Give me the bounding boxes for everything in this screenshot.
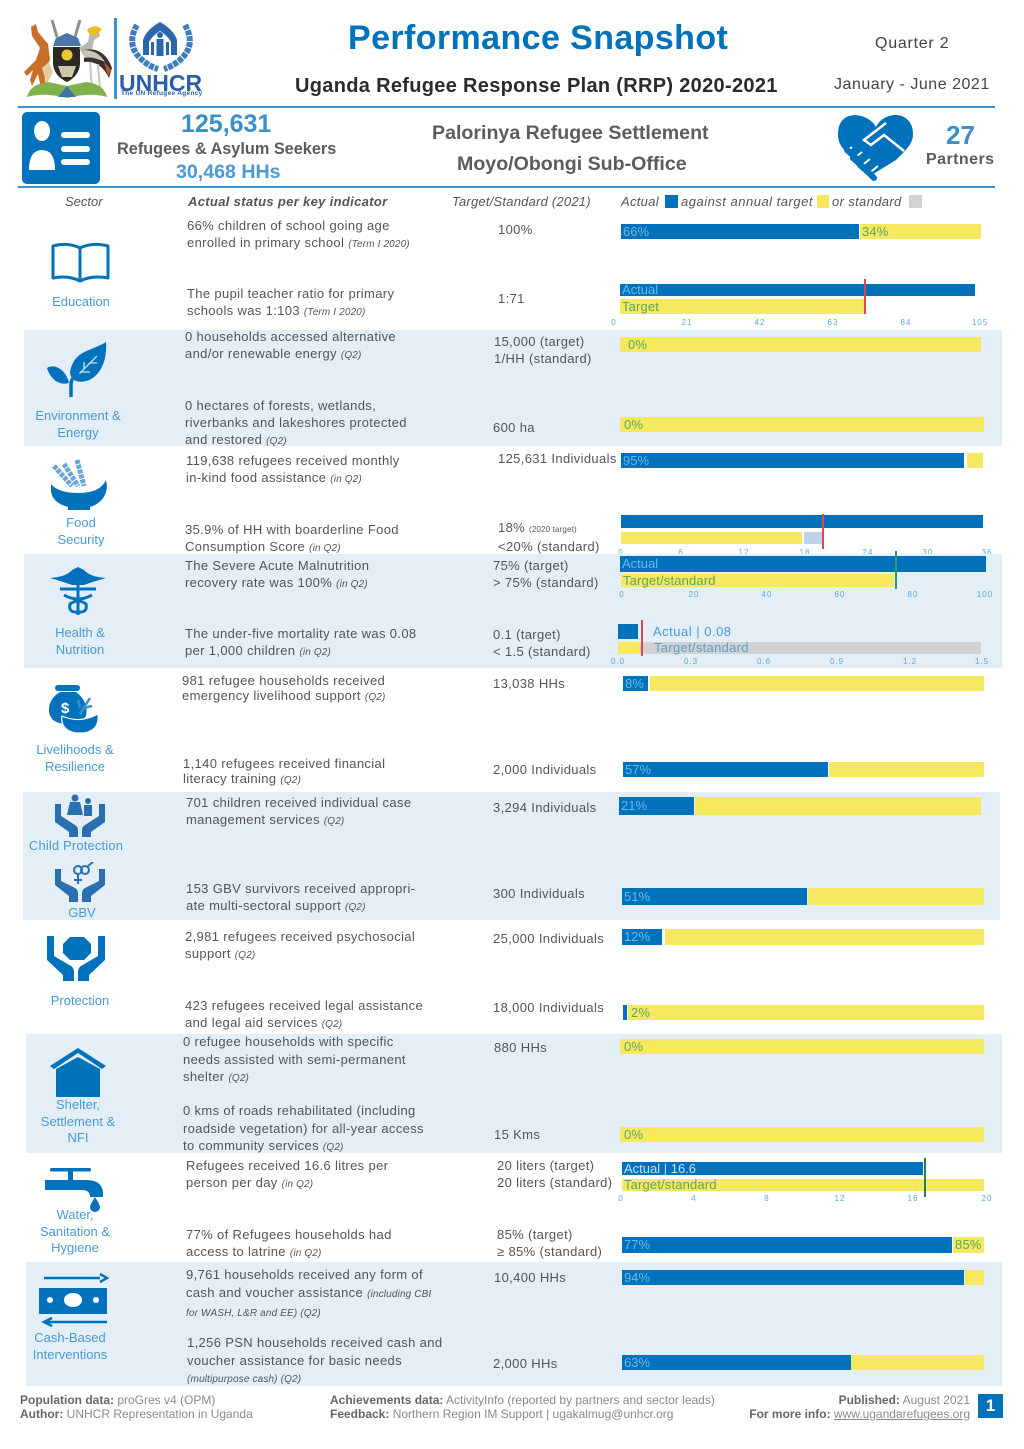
indicator text <box>185 329 396 361</box>
summary band <box>22 110 995 184</box>
panel: livelihoods and resilience <box>24 668 1002 792</box>
axis: 105 <box>972 318 988 327</box>
footer: published and link: For more info: www.ugandarefugees.org <box>749 1407 970 1421</box>
indicator text: 0 hectares of forests, wetlands, <box>185 398 376 413</box>
indicator text: shelter (Q2) <box>183 1069 249 1084</box>
sector label: Settlement & <box>41 1114 115 1128</box>
target text: 18% (2020 target) <box>498 520 577 535</box>
icon: house <box>48 1046 108 1099</box>
axis: 0.3 <box>684 657 698 666</box>
axis <box>612 1194 1002 1203</box>
target text: 600 ha <box>493 420 535 435</box>
bar: case management: 21% <box>621 798 647 813</box>
target text: 20 liters (target) <box>497 1158 594 1173</box>
indicator text <box>186 1226 392 1262</box>
bar chart: pupil teacher ratio: Target <box>622 299 659 314</box>
subtitle: Uganda Refugee Response Plan (RRP) 2020-2021 <box>295 75 778 97</box>
bar chart: malnutrition recovery: Target/standard <box>623 573 716 588</box>
footer: population and author: Population data: proGres v4 (OPM) <box>20 1393 215 1407</box>
indicator text: 77% of Refugees households had <box>186 1227 392 1242</box>
bar: latrine access: 77% <box>624 1237 650 1252</box>
axis: 12 <box>835 1194 845 1203</box>
axis: 60 <box>835 590 845 599</box>
target text: 75% (target) <box>493 558 569 573</box>
indicator text <box>182 673 385 705</box>
panel: environment and energy <box>24 330 1002 446</box>
logo: UNHCR <box>119 22 203 97</box>
header <box>24 18 990 99</box>
axis: 0.6 <box>757 657 771 666</box>
indicator text: recovery rate was 100% (in Q2) <box>185 575 368 590</box>
target text <box>493 558 599 590</box>
axis: 30 <box>923 548 933 557</box>
indicator text: schools was 1:103 (Term I 2020) <box>187 303 365 318</box>
bar: food assistance <box>621 453 983 468</box>
indicator text <box>186 1157 388 1193</box>
logo tagline: The UN Refugee Agency <box>121 90 203 97</box>
indicator text <box>185 928 415 964</box>
target text: 0.1 (target) <box>493 627 561 642</box>
bar: food assistance: 95% <box>623 453 649 468</box>
bar: legal assistance <box>623 1005 984 1020</box>
axis <box>610 657 1000 666</box>
axis: 1.5 <box>975 657 989 666</box>
bar chart: food consumption <box>621 514 983 549</box>
indicator text: 0 refugee households with specific <box>183 1034 394 1049</box>
bar: financial literacy: 57% <box>625 762 651 777</box>
header rule <box>18 106 995 108</box>
bar: multipurpose cash: 63% <box>624 1355 650 1370</box>
indicator text: 119,638 refugees received monthly <box>186 453 400 468</box>
indicator text: (multipurpose cash) (Q2) <box>187 1374 301 1385</box>
sector label <box>10 741 140 775</box>
indicator text: support (Q2) <box>185 946 255 961</box>
axis: 0 <box>619 590 625 599</box>
indicator text <box>185 398 407 447</box>
bar: emergency support <box>623 676 984 691</box>
sector label: NFI <box>68 1130 88 1145</box>
icon: water tap <box>43 1165 105 1212</box>
target text: < 1.5 (standard) <box>493 644 591 659</box>
axis: 80 <box>908 590 918 599</box>
indicator text: ate multi-sectoral support (Q2) <box>186 898 366 913</box>
target text: 13,038 HHs <box>493 676 565 691</box>
footer: achievements and feedback: Feedback: Northern Region IM Support | ugakalmug@unhcr.org <box>330 1407 673 1421</box>
indicator text: 1,256 PSN households received cash and <box>187 1335 442 1350</box>
footer: published and link: Published: August 2021 <box>839 1393 970 1407</box>
axis <box>611 318 988 327</box>
sector label <box>55 625 105 657</box>
indicator text: for WASH, L&R and EE) (Q2) <box>186 1308 321 1319</box>
sector label: GBV <box>68 905 96 920</box>
axis: 0 <box>618 548 624 557</box>
indicator text: Refugees received 16.6 litres per <box>186 1158 388 1173</box>
axis: 63 <box>828 318 838 327</box>
bar: emergency support: 8% <box>625 676 644 691</box>
indicator text <box>187 218 410 250</box>
axis: 6 <box>678 548 684 557</box>
indicator text: roadside vegetation) for all-year access <box>183 1120 424 1136</box>
target text: 125,631 Individuals <box>498 451 617 466</box>
target text <box>494 334 592 366</box>
sector label <box>13 1097 143 1146</box>
indicator text <box>187 286 394 318</box>
page number: 1 <box>986 1396 995 1415</box>
bar: multipurpose cash <box>622 1355 984 1370</box>
axis: 16 <box>908 1194 918 1203</box>
bar chart: malnutrition recovery: Actual <box>622 556 658 571</box>
footer: achievements and feedback: Achievements data: ActivityInfo (reported by partners and sector leads) <box>330 1393 715 1407</box>
bar: GBV support: 51% <box>624 889 650 904</box>
title: Performance Snapshot <box>348 19 728 57</box>
icon: money bag and bowl: $ <box>61 700 70 717</box>
indicator text: emergency livelihood support (Q2) <box>182 688 385 703</box>
sector label: Health & <box>55 625 105 640</box>
indicator text: person per day (in Q2) <box>186 1175 313 1190</box>
sector label <box>5 1329 135 1363</box>
indicator text <box>185 558 369 590</box>
indicator text <box>183 756 385 788</box>
target text: 18,000 Individuals <box>493 1000 604 1015</box>
bar chart: water litres: Actual | 16.6 <box>624 1161 696 1176</box>
target text: 25,000 Individuals <box>493 931 604 946</box>
icon: hands with children <box>53 793 107 838</box>
target text: 15,000 (target) <box>494 334 585 349</box>
icon: hands protecting <box>45 934 107 982</box>
target text: 15 Kms <box>494 1127 540 1142</box>
bar: cash and voucher: 94% <box>624 1270 650 1285</box>
sector label: Energy <box>57 425 99 440</box>
sector label: Environment & <box>35 408 121 423</box>
panel: health and nutrition <box>24 554 1002 668</box>
axis: 100 <box>977 590 993 599</box>
bar chart: pupil teacher ratio: Actual <box>622 282 658 297</box>
axis: 40 <box>762 590 772 599</box>
target text: 880 HHs <box>494 1040 547 1055</box>
sector label <box>58 515 104 547</box>
indicator text: riverbanks and lakeshores protected <box>185 415 407 430</box>
settlement name: Palorinya Refugee Settlement <box>432 122 709 144</box>
bar: latrine access <box>622 1237 984 1253</box>
icon: leaf <box>47 342 106 397</box>
target text: 300 Individuals <box>493 886 585 901</box>
target text: 2,000 Individuals <box>493 762 597 777</box>
target text <box>497 1157 612 1191</box>
footer: achievements and feedback <box>330 1393 715 1421</box>
axis: 20 <box>689 590 699 599</box>
indicator text: The Severe Acute Malnutrition <box>185 558 369 573</box>
axis: 0 <box>611 318 617 327</box>
bar chart: under-five mortality: Actual | 0.08 <box>653 624 732 639</box>
axis <box>619 590 993 599</box>
legend: actual: Actual <box>621 194 659 209</box>
icon: hands with gender symbols <box>53 862 107 904</box>
sector label: Sanitation & <box>40 1224 110 1238</box>
target text: 20 liters (standard) <box>497 1175 612 1190</box>
indicator text <box>183 1102 424 1156</box>
bar chart: water litres <box>622 1158 984 1197</box>
indicator text: management services (Q2) <box>186 812 344 827</box>
bar: renewable energy: 0% <box>628 337 647 352</box>
target text: 1:71 <box>498 291 525 306</box>
indicator text <box>186 880 415 916</box>
bar: enrolment: 34% <box>862 224 888 239</box>
legend: actual <box>620 194 922 209</box>
bar: psychosocial support <box>622 929 984 945</box>
icon: book <box>52 242 110 282</box>
indicator text: to community services (Q2) <box>183 1138 344 1153</box>
bar chart: water litres: Target/standard <box>624 1177 717 1192</box>
indicator text: 0 households accessed alternative <box>185 329 396 344</box>
indicator text: 153 GBV survivors received appropri- <box>186 881 415 896</box>
column: target: Target/Standard (2021) <box>452 194 591 209</box>
sector label <box>10 1207 140 1256</box>
column: status: Actual status per key indicator <box>188 194 388 209</box>
footer <box>18 1392 1004 1420</box>
sector label: Resilience <box>45 759 105 774</box>
target text: > 75% (standard) <box>493 575 599 590</box>
indicator text <box>183 1033 406 1088</box>
logo: Uganda coat of arms <box>24 20 112 98</box>
sector label: Interventions <box>33 1347 107 1362</box>
sector label: Cash-Based <box>34 1330 106 1345</box>
sector label: Water, <box>56 1207 94 1222</box>
indicator text: needs assisted with semi-permanent <box>183 1052 406 1066</box>
indicator text: 9,761 households received any form of <box>186 1267 423 1282</box>
indicator text: 35.9% of HH with boarderline Food <box>185 522 399 537</box>
axis: 8 <box>764 1194 770 1203</box>
indicator text <box>186 1266 431 1322</box>
footer: published and link <box>700 1393 970 1421</box>
panel: protection <box>24 920 1002 1034</box>
axis: 42 <box>755 318 765 327</box>
icon: UNHCR emblem <box>129 22 193 72</box>
target text: <20% (standard) <box>498 539 600 554</box>
bar chart: under-five mortality <box>618 620 981 656</box>
bar: financial literacy <box>623 762 984 777</box>
page number <box>978 1394 1003 1418</box>
indicator text: in-kind food assistance (in Q2) <box>186 470 362 485</box>
indicator text: 423 refugees received legal assistance <box>185 998 423 1013</box>
axis: 1.2 <box>903 657 917 666</box>
target text: 100% <box>498 222 533 237</box>
sector label: Child Protection <box>29 838 123 853</box>
legend: actual: or standard <box>832 194 902 209</box>
bar: GBV support <box>622 888 984 905</box>
target text <box>498 520 600 554</box>
indicator text: and legal aid services (Q2) <box>185 1015 342 1030</box>
indicator text: enrolled in primary school (Term I 2020) <box>187 235 410 250</box>
indicator text: 2,981 refugees received psychosocial <box>185 929 415 944</box>
icon: person card <box>22 112 100 184</box>
indicator text: 0 kms of roads rehabilitated (including <box>183 1103 416 1118</box>
stat label: Refugees & Asylum Seekers <box>117 140 336 158</box>
sector label: Nutrition <box>56 642 104 657</box>
sector label: Food <box>66 515 96 530</box>
panel: child protection and GBV <box>23 792 1000 920</box>
bar: legal assistance: 2% <box>631 1005 650 1020</box>
icon: caduceus <box>50 567 106 615</box>
target text: 10,400 HHs <box>494 1270 566 1285</box>
bar: psychosocial support: 12% <box>624 929 650 944</box>
legend: actual: against annual target <box>681 194 813 209</box>
bar: latrine access: 85% <box>955 1237 981 1252</box>
panel: water, sanitation and hygiene <box>26 1153 1002 1262</box>
bar: semi-permanent shelter: 0% <box>624 1039 643 1054</box>
panel: food security <box>51 451 992 557</box>
sector label: Livelihoods & <box>36 742 114 757</box>
indicator text: literacy training (Q2) <box>183 771 301 786</box>
target text <box>493 627 591 659</box>
axis: 18 <box>800 548 810 557</box>
axis: 21 <box>682 318 692 327</box>
panel: shelter, settlement and NFI <box>26 1034 1002 1153</box>
axis: 0.9 <box>830 657 844 666</box>
target text: 85% (target) <box>497 1227 573 1242</box>
indicator text: per 1,000 children (in Q2) <box>185 643 331 658</box>
stat: refugees: 125,631 <box>181 110 271 138</box>
sector label: Security <box>58 532 104 547</box>
logo wordmark: UNHCR <box>119 70 202 96</box>
footer: population and author <box>20 1393 253 1421</box>
bar chart: malnutrition recovery <box>620 551 986 589</box>
indicator text: 981 refugee households received <box>182 673 385 688</box>
indicator text: and/or renewable energy (Q2) <box>185 346 361 361</box>
column headers <box>65 194 922 209</box>
bar chart: pupil teacher ratio <box>620 279 975 314</box>
indicator text <box>186 453 400 485</box>
column: sector: Sector <box>65 194 103 209</box>
indicator text: 1,140 refugees received financial <box>183 756 385 771</box>
panel: education <box>52 218 988 327</box>
indicator text: and restored (Q2) <box>185 432 287 447</box>
axis: 12 <box>739 548 749 557</box>
indicator text <box>185 626 417 658</box>
target text: 2,000 HHs <box>493 1356 558 1371</box>
axis <box>618 548 992 557</box>
indicator text <box>185 522 399 554</box>
bar: roads rehabilitated: 0% <box>624 1127 643 1142</box>
sector label: Education <box>52 294 110 309</box>
indicator text: The pupil teacher ratio for primary <box>187 286 394 301</box>
icon: bowl and wheat <box>51 459 107 510</box>
icon: handshake heart <box>838 115 913 181</box>
axis: 20 <box>982 1194 992 1203</box>
icon: cash and arrows <box>37 1272 109 1328</box>
axis: 0 <box>618 1194 624 1203</box>
bar chart: under-five mortality: Target/standard <box>654 640 749 655</box>
target text <box>497 1226 602 1260</box>
axis: 36 <box>982 548 992 557</box>
indicator text: 701 children received individual case <box>186 795 411 810</box>
stat label: Partners <box>926 151 995 168</box>
sector label: Shelter, <box>56 1097 100 1112</box>
bar: enrolment: 66% <box>623 224 649 239</box>
indicator text: Consumption Score (in Q2) <box>185 539 341 554</box>
target text: ≥ 85% (standard) <box>497 1244 602 1259</box>
target text: 1/HH (standard) <box>494 351 592 366</box>
indicator text: cash and voucher assistance (including CBI <box>186 1284 431 1300</box>
stat: households: 30,468 HHs <box>176 161 281 183</box>
quarter: Quarter 2 <box>875 35 949 52</box>
bar: enrolment <box>621 224 981 239</box>
indicator text <box>185 997 423 1033</box>
sub-office name: Moyo/Obongi Sub-Office <box>457 153 687 175</box>
bar: case management <box>619 797 981 815</box>
sector label: Protection <box>51 993 109 1008</box>
period: January - June 2021 <box>834 76 990 93</box>
sector label: Hygiene <box>51 1240 99 1255</box>
indicator text <box>187 1334 442 1388</box>
axis: 24 <box>863 548 873 557</box>
axis: 4 <box>691 1194 697 1203</box>
indicator text: voucher assistance for basic needs <box>187 1352 402 1368</box>
icon: money bag and bowl <box>47 683 101 735</box>
bar: cash and voucher <box>622 1270 984 1285</box>
axis: 84 <box>901 318 911 327</box>
target text: 3,294 Individuals <box>493 800 597 815</box>
stat: partners: 27 <box>946 120 975 150</box>
panel: cash-based interventions <box>26 1262 1002 1386</box>
indicator text: The under-five mortality rate was 0.08 <box>185 626 417 641</box>
axis: 0.0 <box>611 657 625 666</box>
footer: population and author: Author: UNHCR Representation in Uganda <box>20 1407 253 1421</box>
indicator text: 66% children of school going age <box>187 218 390 233</box>
indicator text: access to latrine (in Q2) <box>186 1244 321 1259</box>
indicator text <box>186 794 411 830</box>
sector label <box>35 408 121 440</box>
bar: hectares restored: 0% <box>624 417 643 432</box>
summary rule <box>18 186 995 188</box>
divider line <box>114 18 116 99</box>
